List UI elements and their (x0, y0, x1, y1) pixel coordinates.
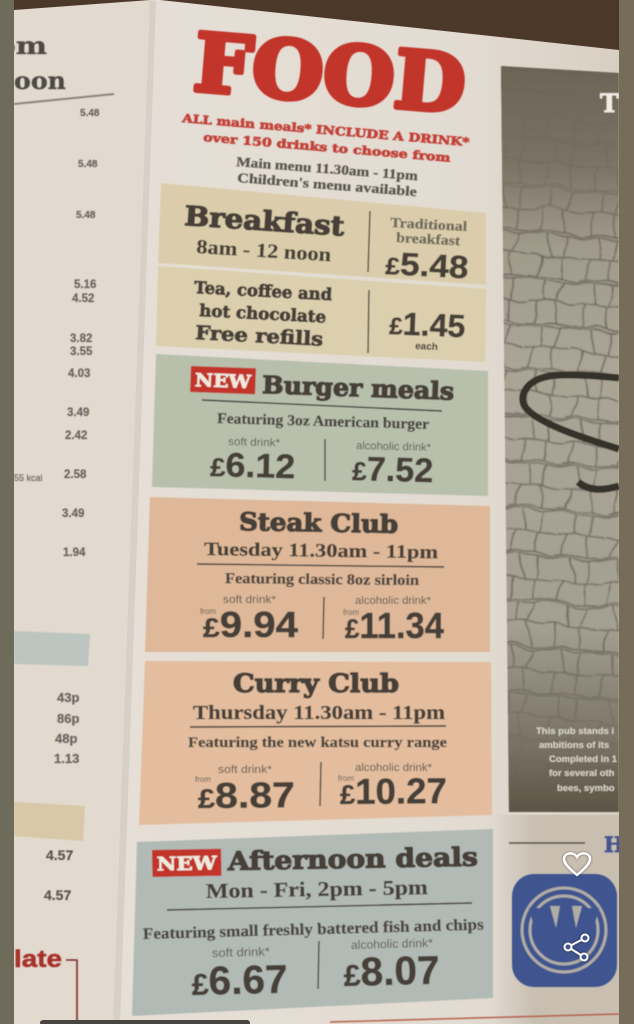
icon: heart (564, 853, 590, 875)
new badge (152, 849, 221, 877)
left page price column: 55 kcal (14, 473, 43, 483)
new badge: NEW (157, 853, 217, 875)
icon: share (564, 934, 588, 960)
steak prices: from (200, 607, 216, 616)
burger description: Featuring 3oz American burger (217, 411, 430, 433)
panel: afternoon deals: Mon - Fri, 2pm - 5pm (206, 875, 429, 903)
steak description: Featuring classic 8oz sirloin (225, 571, 420, 589)
refills text: Free refills (195, 322, 324, 351)
curry description: Featuring the new katsu curry range (188, 735, 447, 751)
left page price column: 43p (57, 690, 79, 705)
steak prices: £9.94 (203, 604, 298, 645)
panel: breakfast: 8am - 12 noon (196, 236, 332, 266)
left page price column: 5.48 (78, 159, 98, 170)
left page price column: 2.58 (64, 469, 87, 481)
burger prices: £6.12 (210, 446, 296, 486)
left page price column: 48p (55, 731, 77, 746)
steak prices (200, 594, 444, 646)
bottom overlay bar (40, 1020, 250, 1024)
traditional breakfast price: Traditional (390, 216, 468, 235)
left page price column: 3.82 (70, 333, 92, 345)
steak prices: £11.34 (345, 605, 444, 646)
left page price column: 2.42 (65, 430, 87, 442)
left page price column: 1.13 (54, 751, 79, 766)
panel: steak club: Tuesday 11.30am - 11pm (204, 539, 438, 563)
breakfast heading: Breakfast (184, 201, 346, 243)
refill price: £1.45 (389, 305, 466, 344)
left page heading fragment (0, 31, 66, 95)
refills text (194, 278, 333, 351)
burger prices (210, 436, 434, 490)
steak prices: soft drink* (223, 594, 277, 606)
panel: mosaic image (470, 40, 634, 840)
left page price column: 4.57 (44, 887, 71, 903)
pub caption: bees, symbo (557, 783, 615, 794)
right side bar (619, 0, 634, 1024)
curry prices: from (338, 774, 354, 783)
menu hours (236, 154, 419, 199)
left page blue band (14, 631, 90, 666)
afternoon prices: £8.07 (343, 948, 440, 995)
traditional breakfast price: £5.48 (385, 245, 469, 285)
panel: left menu page (0, 0, 150, 1024)
title: FOOD: FOOD (190, 15, 469, 132)
left page chocolate label: late (14, 946, 62, 973)
curry prices: £10.27 (340, 770, 447, 812)
refills text: Tea, coffee and (194, 278, 333, 304)
pub caption (536, 726, 618, 794)
panel: afternoon deals (132, 829, 493, 1016)
curry prices: £8.87 (198, 774, 295, 816)
left page price column: 4.57 (46, 847, 73, 863)
pub caption: ambitions of its (539, 740, 609, 751)
menu hours: Main menu 11.30am - 11pm (236, 154, 419, 183)
left page price column: 3.55 (70, 346, 93, 358)
traditional breakfast price (385, 216, 469, 285)
curry prices: soft drink* (218, 764, 273, 776)
pub caption: This pub stands i (536, 726, 614, 737)
steak prices: from (343, 608, 359, 617)
afternoon heading: Afternoon deals (226, 843, 478, 877)
panel: tea and coffee: each (415, 341, 438, 353)
burger prices: soft drink* (228, 436, 281, 449)
afternoon prices: soft drink* (212, 944, 270, 960)
heading fragment: H (604, 832, 624, 857)
left side bar (0, 0, 14, 1024)
new badge (190, 366, 256, 394)
left page price column (14, 108, 100, 903)
afternoon prices: £6.67 (191, 957, 288, 1004)
new badge: NEW (195, 370, 252, 393)
menu hours: Children's menu available (237, 170, 417, 199)
subtitle: main meals include a drink: over 150 drinks to choose from (203, 130, 451, 165)
left page price column: 1.94 (63, 547, 86, 559)
left page price column: 4.03 (68, 368, 90, 380)
left page price column: 5.48 (76, 210, 96, 221)
panel: curry club: Thursday 11.30am - 11pm (193, 702, 445, 724)
curry heading: Curry Club (233, 669, 399, 698)
subtitle: main meals include a drink: ALL main meals* INCLUDE A DRINK* (181, 111, 470, 149)
mosaic oval motif (523, 375, 619, 489)
icon: W logo: W (530, 895, 599, 967)
left page price column: 86p (57, 711, 79, 726)
burger prices: £7.52 (352, 450, 434, 490)
afternoon description: Featuring small freshly battered fish and chips (143, 916, 484, 943)
burger prices: alcoholic drink* (356, 440, 432, 454)
afternoon prices: alcoholic drink* (351, 936, 433, 952)
icon: W logo (512, 874, 617, 987)
pub caption: Completed in 1 (549, 754, 618, 765)
left page price column: 3.49 (62, 508, 84, 520)
left page price column: 5.48 (80, 108, 100, 119)
panel: burger meals (152, 354, 488, 496)
afternoon prices (191, 936, 440, 1004)
curry prices: alcoholic drink* (355, 762, 433, 774)
panel: curry club (139, 661, 492, 825)
subtitle: main meals include a drink (181, 111, 470, 165)
steak prices: alcoholic drink* (355, 595, 432, 607)
left page price column: 3.49 (67, 407, 89, 419)
background wood (0, 0, 634, 70)
pub caption: for several oth (549, 768, 615, 779)
left page heading fragment: oon (14, 66, 66, 95)
refills text: hot chocolate (199, 301, 327, 327)
left page price column: 4.52 (72, 293, 94, 305)
mosaic heading fragment: T (600, 89, 619, 118)
left page tan band (14, 802, 85, 841)
panel: breakfast (158, 183, 486, 285)
left page price column: 5.16 (74, 279, 96, 291)
steak heading: Steak Club (239, 507, 398, 539)
panel: steak club (145, 497, 490, 652)
panel: tea and coffee (156, 266, 486, 362)
curry prices: from (195, 775, 211, 784)
curry prices (195, 762, 447, 816)
burger heading: Burger meals (262, 370, 455, 406)
traditional breakfast price: breakfast (396, 231, 461, 249)
